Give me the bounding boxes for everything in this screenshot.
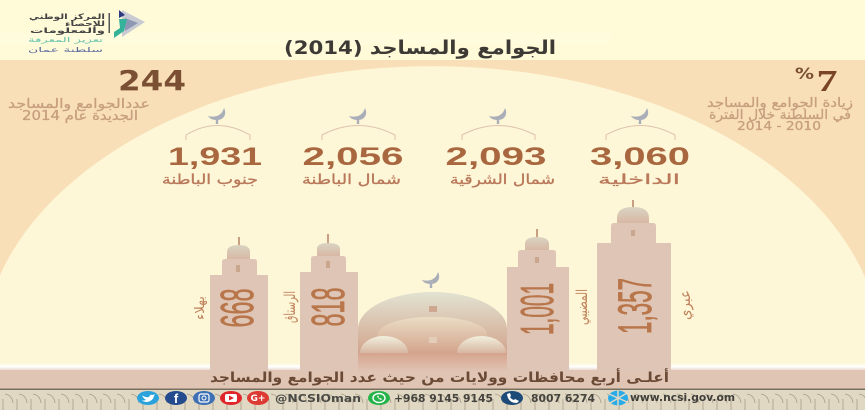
governorate: North Batinah — [302, 108, 404, 188]
minaret: Bahla: بهلاء — [193, 296, 208, 320]
icon: facebook: f — [174, 391, 179, 406]
logo — [28, 10, 145, 54]
logo name — [29, 12, 106, 35]
logo country: سلطنة عمان — [28, 46, 103, 54]
website: www.ncsi.gov.om — [630, 391, 735, 404]
minaret: Mudaibi: المضيبي — [573, 289, 592, 325]
stat: 7% increase — [707, 63, 853, 133]
logo name: المركز الوطني — [29, 12, 105, 21]
minaret: Ibri: عبري — [676, 290, 695, 320]
governorate: Dakhiliyah: 3,060 — [590, 143, 690, 171]
minaret: Bahla — [193, 237, 268, 372]
footer bar — [0, 388, 865, 410]
caption band — [0, 370, 865, 390]
minaret: Ibri — [597, 200, 695, 372]
central mosque dome — [358, 272, 507, 372]
logo divider — [108, 13, 110, 33]
stat: 7% increase: في السلطنة خلال الفترة — [709, 108, 851, 123]
icon: google plus: G+ — [251, 394, 265, 404]
minaret: Mudaibi — [507, 229, 592, 372]
icon: facebook — [165, 391, 187, 406]
stat: new mosques 244 — [8, 64, 186, 124]
logo tagline: تعزيز المعرفة — [28, 36, 103, 44]
governorate: North Batinah: شمال الباطنة — [302, 172, 401, 188]
governorate: North Sharqiyah: شمال الشرقية — [450, 172, 555, 188]
minaret: Ibri: 1,357 — [608, 278, 661, 334]
icon: phone — [501, 391, 523, 405]
minaret: Bahla: 668 — [211, 288, 263, 328]
governorate: South Batinah: جنوب الباطنة — [162, 172, 258, 188]
governorate: North Sharqiyah: 2,093 — [446, 143, 546, 171]
minaret: Rustaq: 818 — [302, 288, 354, 326]
stat: 7% increase: % — [795, 64, 814, 83]
ground highlight — [0, 363, 865, 372]
stat: new mosques 244: 244 — [118, 64, 186, 97]
governorate: South Batinah: 1,931 — [168, 143, 262, 171]
stat: 7% increase: 2014 - 2010 — [737, 119, 821, 133]
icon: whatsapp — [368, 391, 390, 405]
logo icon — [114, 10, 145, 38]
minaret: Mudaibi: 1,001 — [511, 283, 563, 335]
minaret: Rustaq — [281, 234, 358, 372]
minaret: Rustaq: الرستاق — [281, 291, 299, 323]
governorate: North Batinah: 2,056 — [302, 143, 404, 171]
title: الجوامع والمساجد (2014) — [284, 37, 556, 59]
icon: youtube — [220, 391, 242, 405]
icon: globe — [608, 390, 628, 406]
icon: twitter — [137, 391, 159, 405]
governorate: North Sharqiyah — [446, 108, 555, 188]
logo name: للإحصاء — [65, 19, 105, 28]
caption: أعلـى أربع محافظات وولايات من حيث عدد الجوامع والمساجد — [210, 368, 669, 386]
icon: google plus — [247, 391, 269, 405]
social handle: @NCSIOman — [275, 392, 361, 405]
stat: new mosques 244: الجديدة عام 2014 — [22, 109, 138, 124]
stat: 7% increase: 7 — [816, 63, 838, 98]
stat: 7% increase: زيادة الجوامع والمساجد — [707, 96, 853, 111]
icon: instagram — [193, 391, 215, 405]
whatsapp number: +968 9145 9145 — [394, 392, 493, 405]
governorate: Dakhiliyah: الداخلية — [598, 172, 680, 188]
governorate: Dakhiliyah — [590, 108, 690, 188]
phone number: 8007 6274 — [531, 392, 595, 405]
stat: new mosques 244: عددالجوامع والمساجد — [8, 97, 150, 112]
governorate: South Batinah — [162, 108, 262, 188]
logo name: والمعلومات — [30, 26, 106, 35]
